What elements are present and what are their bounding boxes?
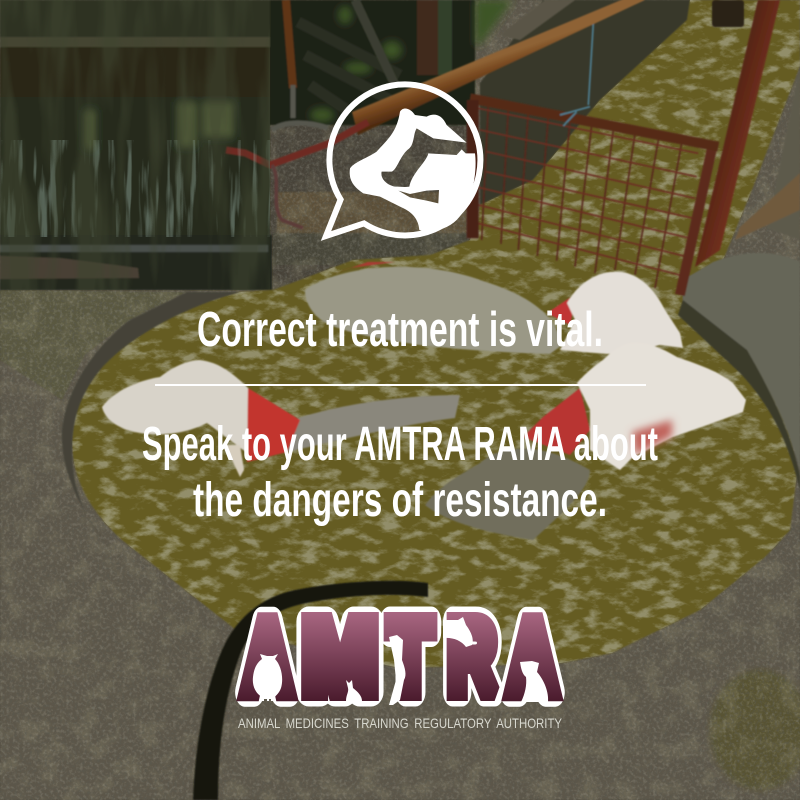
text block: call to action: the dangers of resistance. <box>193 474 607 527</box>
brick strip <box>735 173 800 240</box>
wood top plank <box>0 0 270 37</box>
logo white outline: A <box>508 599 557 714</box>
sheep 1 red mark <box>547 293 577 325</box>
logo white outline: M <box>303 599 377 714</box>
cow and sheep silhouette <box>350 108 476 231</box>
fence slats <box>298 0 445 112</box>
speech bubble outline <box>326 84 480 236</box>
logo letters <box>243 599 557 714</box>
logo letters: A <box>508 599 557 714</box>
icon: horse head <box>443 617 473 647</box>
sheep 1 body <box>305 267 562 354</box>
logo white outline: T <box>389 599 432 714</box>
gate mesh and frame <box>470 23 718 295</box>
grass patches <box>310 0 513 122</box>
right bank top <box>767 66 800 240</box>
logo letters: R <box>448 599 496 714</box>
sheep 2 neck <box>287 395 460 452</box>
logo: AMTRA <box>243 599 557 714</box>
wood bottom rail <box>0 235 272 290</box>
sheep 1 head <box>560 272 683 354</box>
sheep 2 red mark <box>247 388 300 462</box>
logo letters: T <box>389 599 432 714</box>
sheep 2 ear <box>225 445 244 477</box>
red latch handle <box>226 122 368 165</box>
heading: correct treatment: Correct treatment is vital. <box>197 303 603 357</box>
frame left post <box>455 100 491 238</box>
sheep 2 head <box>102 360 250 455</box>
divider line <box>155 384 646 386</box>
icon: cat <box>346 680 362 701</box>
frame right bar <box>680 150 712 295</box>
wood ledge <box>0 37 270 97</box>
curb side <box>678 300 800 490</box>
frame top bar <box>470 98 718 147</box>
mesh horizontals <box>472 108 698 276</box>
mesh verticals <box>482 105 682 288</box>
wood wall <box>0 97 270 237</box>
sheep 3 red mark <box>523 388 590 455</box>
logo letters: A <box>243 599 292 714</box>
logo white outline: A <box>243 599 292 714</box>
sheep 3 body <box>425 448 590 540</box>
icon: horse leg <box>389 635 405 705</box>
foam on water <box>72 0 800 668</box>
black hose <box>193 581 428 800</box>
right curb <box>683 253 800 470</box>
pebbled ledge <box>0 290 187 400</box>
pool rim left <box>62 292 240 560</box>
rod clamp <box>272 85 328 130</box>
lower right olive stain <box>710 670 800 790</box>
stone lip <box>273 233 473 265</box>
text block: call to action <box>142 418 658 527</box>
logo white outline <box>243 599 557 714</box>
moss on wall <box>85 102 233 150</box>
sheep 3 head <box>577 343 746 470</box>
red post <box>695 0 780 267</box>
wooden rail <box>352 0 645 135</box>
icon: speech bubble with cow and sheep <box>326 84 480 236</box>
logo letters: M <box>303 599 377 714</box>
rusty hinge <box>0 256 139 279</box>
stone wall top right <box>480 0 690 205</box>
upper yard stones <box>270 120 475 292</box>
metal rod <box>286 0 293 88</box>
blue rope <box>560 23 593 126</box>
icon: sheep <box>253 654 282 701</box>
dark fence <box>270 0 475 125</box>
olive earth band <box>277 192 472 234</box>
dark top post <box>712 0 744 27</box>
logo white outline: R <box>448 599 496 714</box>
wood grain <box>0 0 270 290</box>
tagline: ANIMAL MEDICINES TRAINING REGULATORY AUTHORITY <box>238 715 563 731</box>
icon: dog <box>520 661 548 702</box>
water body <box>72 0 800 668</box>
wood streaks <box>0 140 270 237</box>
